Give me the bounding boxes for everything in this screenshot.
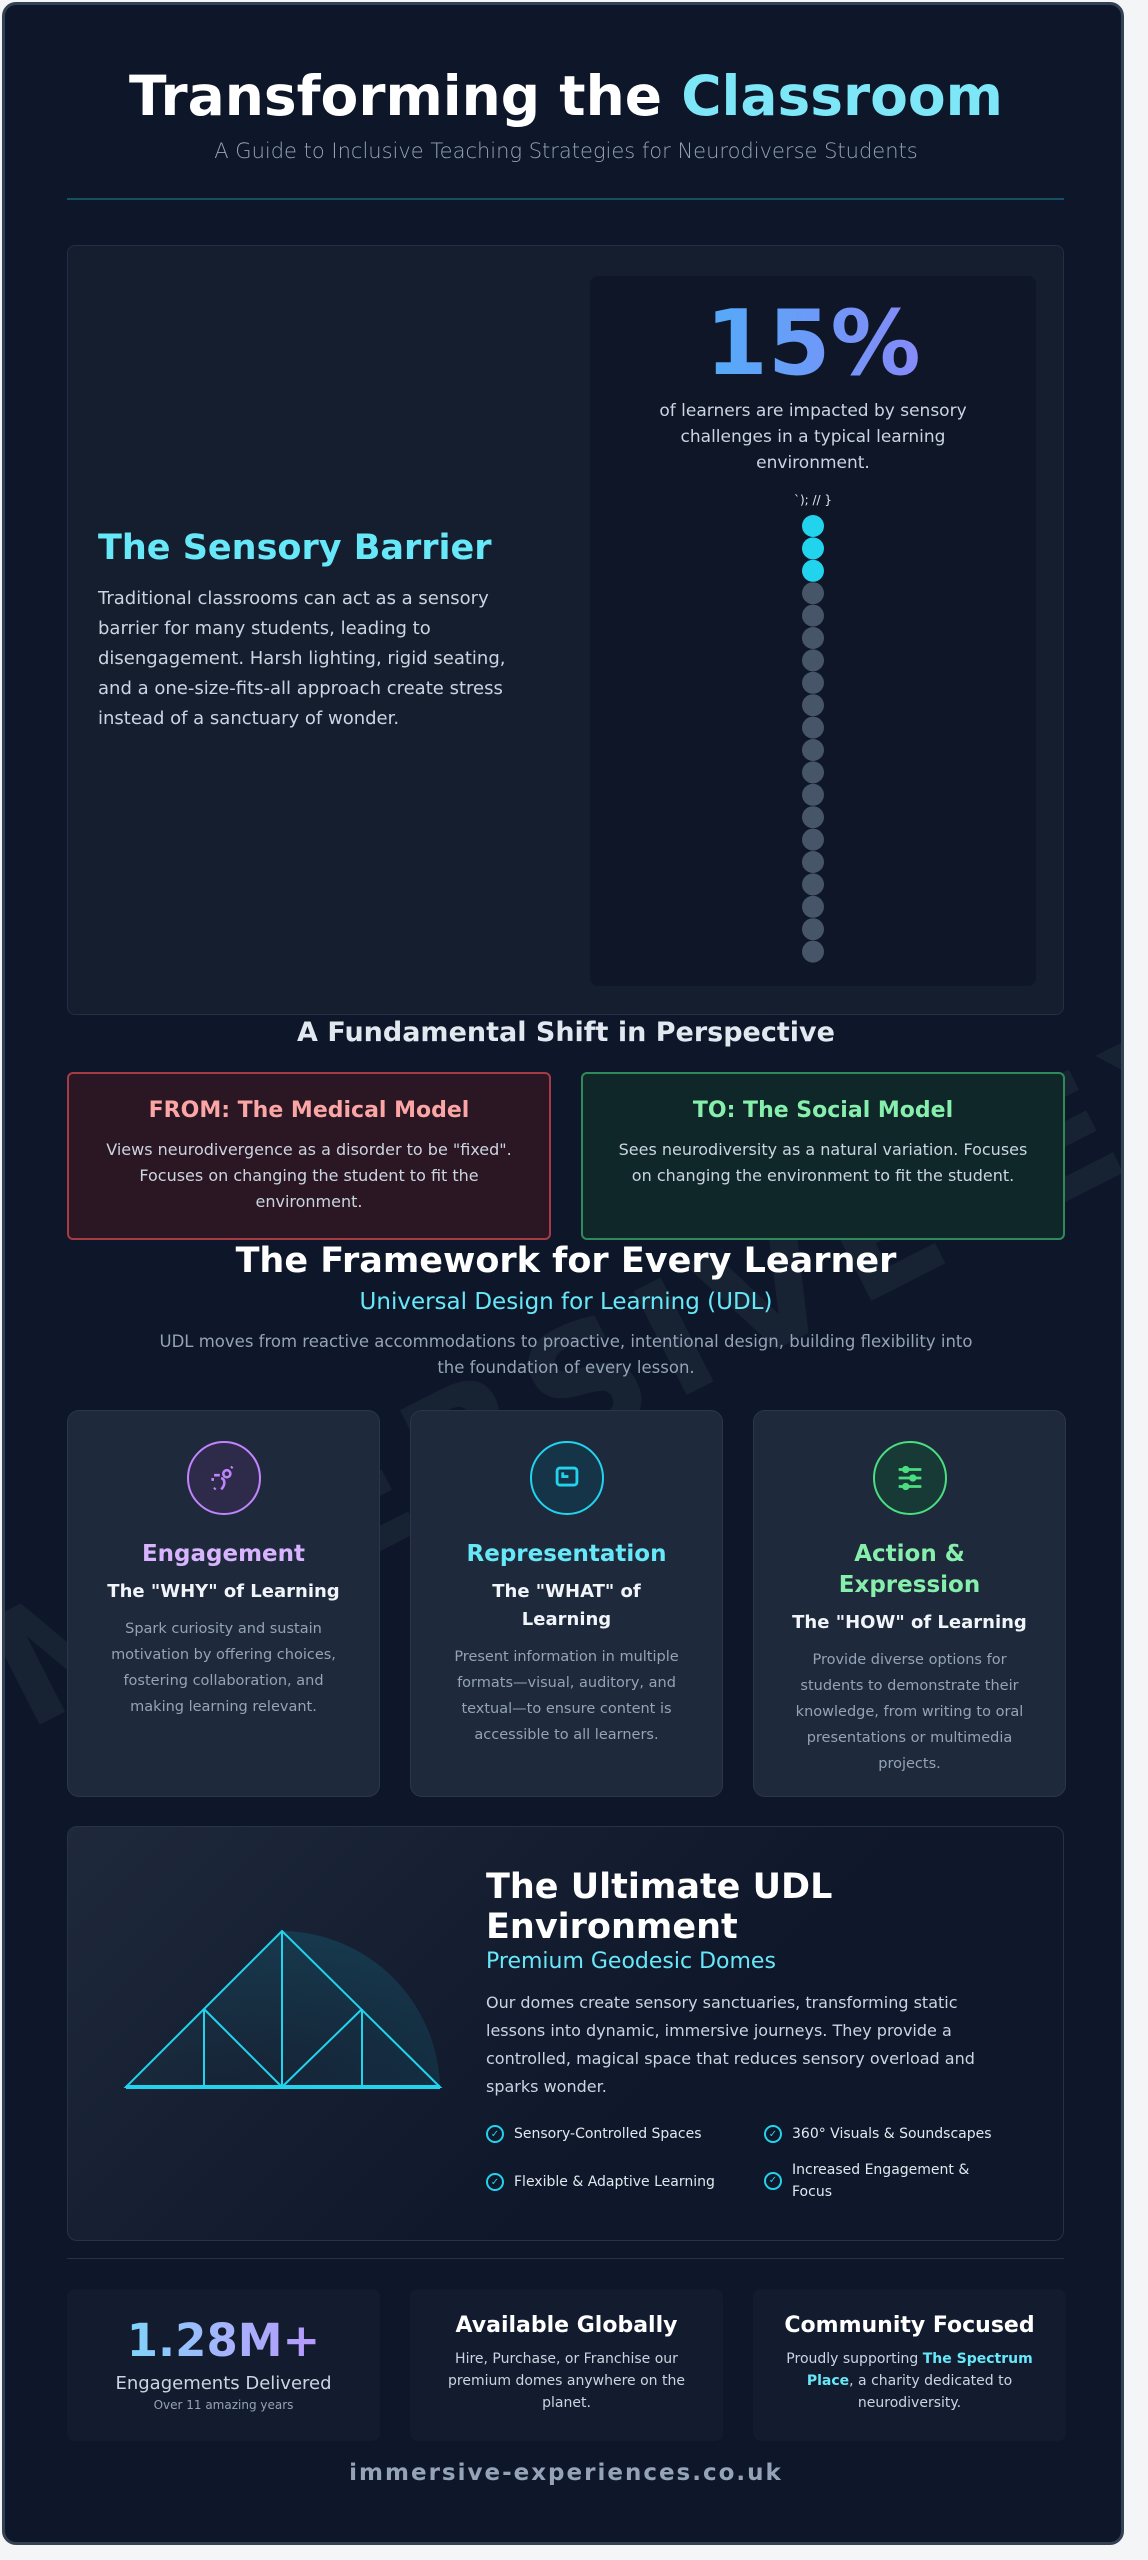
stat: community focused: Proudly supporting The Spectrum Place, a charity dedicated to neurodiversity. [786, 2351, 1033, 2411]
panel: action & expression: Expression [839, 1572, 980, 1598]
icon: screen [530, 1441, 604, 1515]
panel: engagement: Spark curiosity and sustain motivation by offering choices, fostering collaboration, and making learning relevant. [111, 1621, 336, 1715]
panel: representation: The "WHAT" of [492, 1581, 641, 1602]
feature list: ✓ [491, 2176, 499, 2188]
icon: brain [186, 1441, 260, 1515]
stat: community focused: Community Focused [784, 2313, 1035, 2338]
subheading: domes: Premium Geodesic Domes [486, 1949, 776, 1974]
icon: sliders [872, 1441, 946, 1515]
feature list: ✓ [491, 2128, 499, 2140]
text block: UDL intro: UDL moves from reactive accommodations to proactive, intentional design, building flexibility into the foundation of every lesson. [160, 1332, 972, 1377]
stat: community focused [753, 2289, 1066, 2441]
panel: to social model: Sees neurodiversity as a natural variation. Focuses on changing the environment to fit the student. [619, 1140, 1027, 1185]
footer url: immersive-experiences.co.uk [349, 2460, 783, 2486]
big stat: 15% [705, 291, 921, 396]
panel: action & expression: Provide diverse options for students to demonstrate their knowledge, from writing to oral presentations or multimedia projects. [796, 1652, 1023, 1772]
feature list: ✓ [769, 2128, 777, 2140]
stat: available globally: Hire, Purchase, or Franchise our premium domes anywhere on the planet. [448, 2351, 685, 2411]
subtitle: A Guide to Inclusive Teaching Strategies for Neurodiverse Students [214, 139, 918, 163]
heading: UDL environment [486, 1867, 832, 1947]
feature list: 360° Visuals & Soundscapes [792, 2126, 992, 2142]
panel: to social model: TO: The Social Model [693, 1098, 953, 1123]
panel: engagement: The "WHY" of Learning [107, 1581, 340, 1602]
panel: from medical model: Views neurodivergence as a disorder to be "fixed". Focuses on changing the student to fit the environment. [106, 1140, 512, 1211]
feature list: Increased Engagement & [792, 2162, 969, 2178]
stat: available globally [410, 2289, 723, 2441]
panel: UDL environment domes [67, 1826, 1064, 2241]
text block: domes: Our domes create sensory sanctuaries, transforming static lessons into dynamic, immersive journeys. They provide a controlled, magical space that reduces sensory overload and sparks wonder. [486, 1993, 975, 2096]
stat: available globally: Available Globally [456, 2313, 677, 2338]
heading: shift: A Fundamental Shift in Perspective [297, 1017, 835, 1048]
panel: representation: Learning [522, 1609, 611, 1630]
stat: engagements: Engagements Delivered [115, 2373, 332, 2394]
title: Transforming the Classroom [129, 64, 1003, 128]
stat box: 15% [590, 276, 1036, 986]
feature list: ✓ [769, 2175, 777, 2186]
stat box: 15%: `); // } [794, 493, 832, 507]
panel: action & expression: Action & [854, 1541, 965, 1567]
panel: sensory barrier [67, 245, 1064, 1015]
stat: engagements [67, 2289, 380, 2441]
feature list: Focus [792, 2184, 832, 2200]
heading: framework: The Framework for Every Learner [236, 1241, 896, 1281]
stat: engagements: Over 11 amazing years [154, 2398, 293, 2412]
stat: engagements: 1.28M+ [127, 2314, 320, 2367]
panel: engagement: Engagement [142, 1541, 305, 1567]
dot chart [802, 515, 824, 963]
panel: engagement [67, 1410, 380, 1797]
subheading: UDL: Universal Design for Learning (UDL) [360, 1289, 772, 1315]
feature list: Sensory-Controlled Spaces [514, 2126, 701, 2142]
panel: to social model [581, 1072, 1065, 1240]
panel: from medical model: FROM: The Medical Model [149, 1098, 469, 1123]
big stat [590, 284, 1036, 404]
heading: sensory barrier: The Sensory Barrier [98, 528, 492, 568]
text block: sensory barrier: Traditional classrooms can act as a sensory barrier for many students, leading to disengagement. Harsh lighting, rigid seating, and a one-size-fits-all approach create stress instead of a sanctuary of wonder. [98, 588, 505, 729]
panel: representation: Present information in multiple formats—visual, auditory, and textual—to ensure content is accessible to all learners. [454, 1649, 679, 1743]
panel: action & expression: The "HOW" of Learning [792, 1612, 1027, 1633]
icon: geodesic dome [124, 1930, 442, 2089]
heading: UDL environment: The Ultimate UDL [486, 1867, 832, 1907]
panel: representation [410, 1410, 723, 1797]
stat caption: of learners are impacted by sensory challenges in a typical learning environment. [659, 401, 967, 473]
panel: action & expression [753, 1410, 1066, 1797]
panel: representation: Representation [467, 1541, 666, 1567]
feature list [486, 2125, 992, 2200]
heading: UDL environment: Environment [486, 1907, 738, 1947]
panel: from medical model [67, 1072, 551, 1240]
feature list: Flexible & Adaptive Learning [514, 2174, 715, 2190]
